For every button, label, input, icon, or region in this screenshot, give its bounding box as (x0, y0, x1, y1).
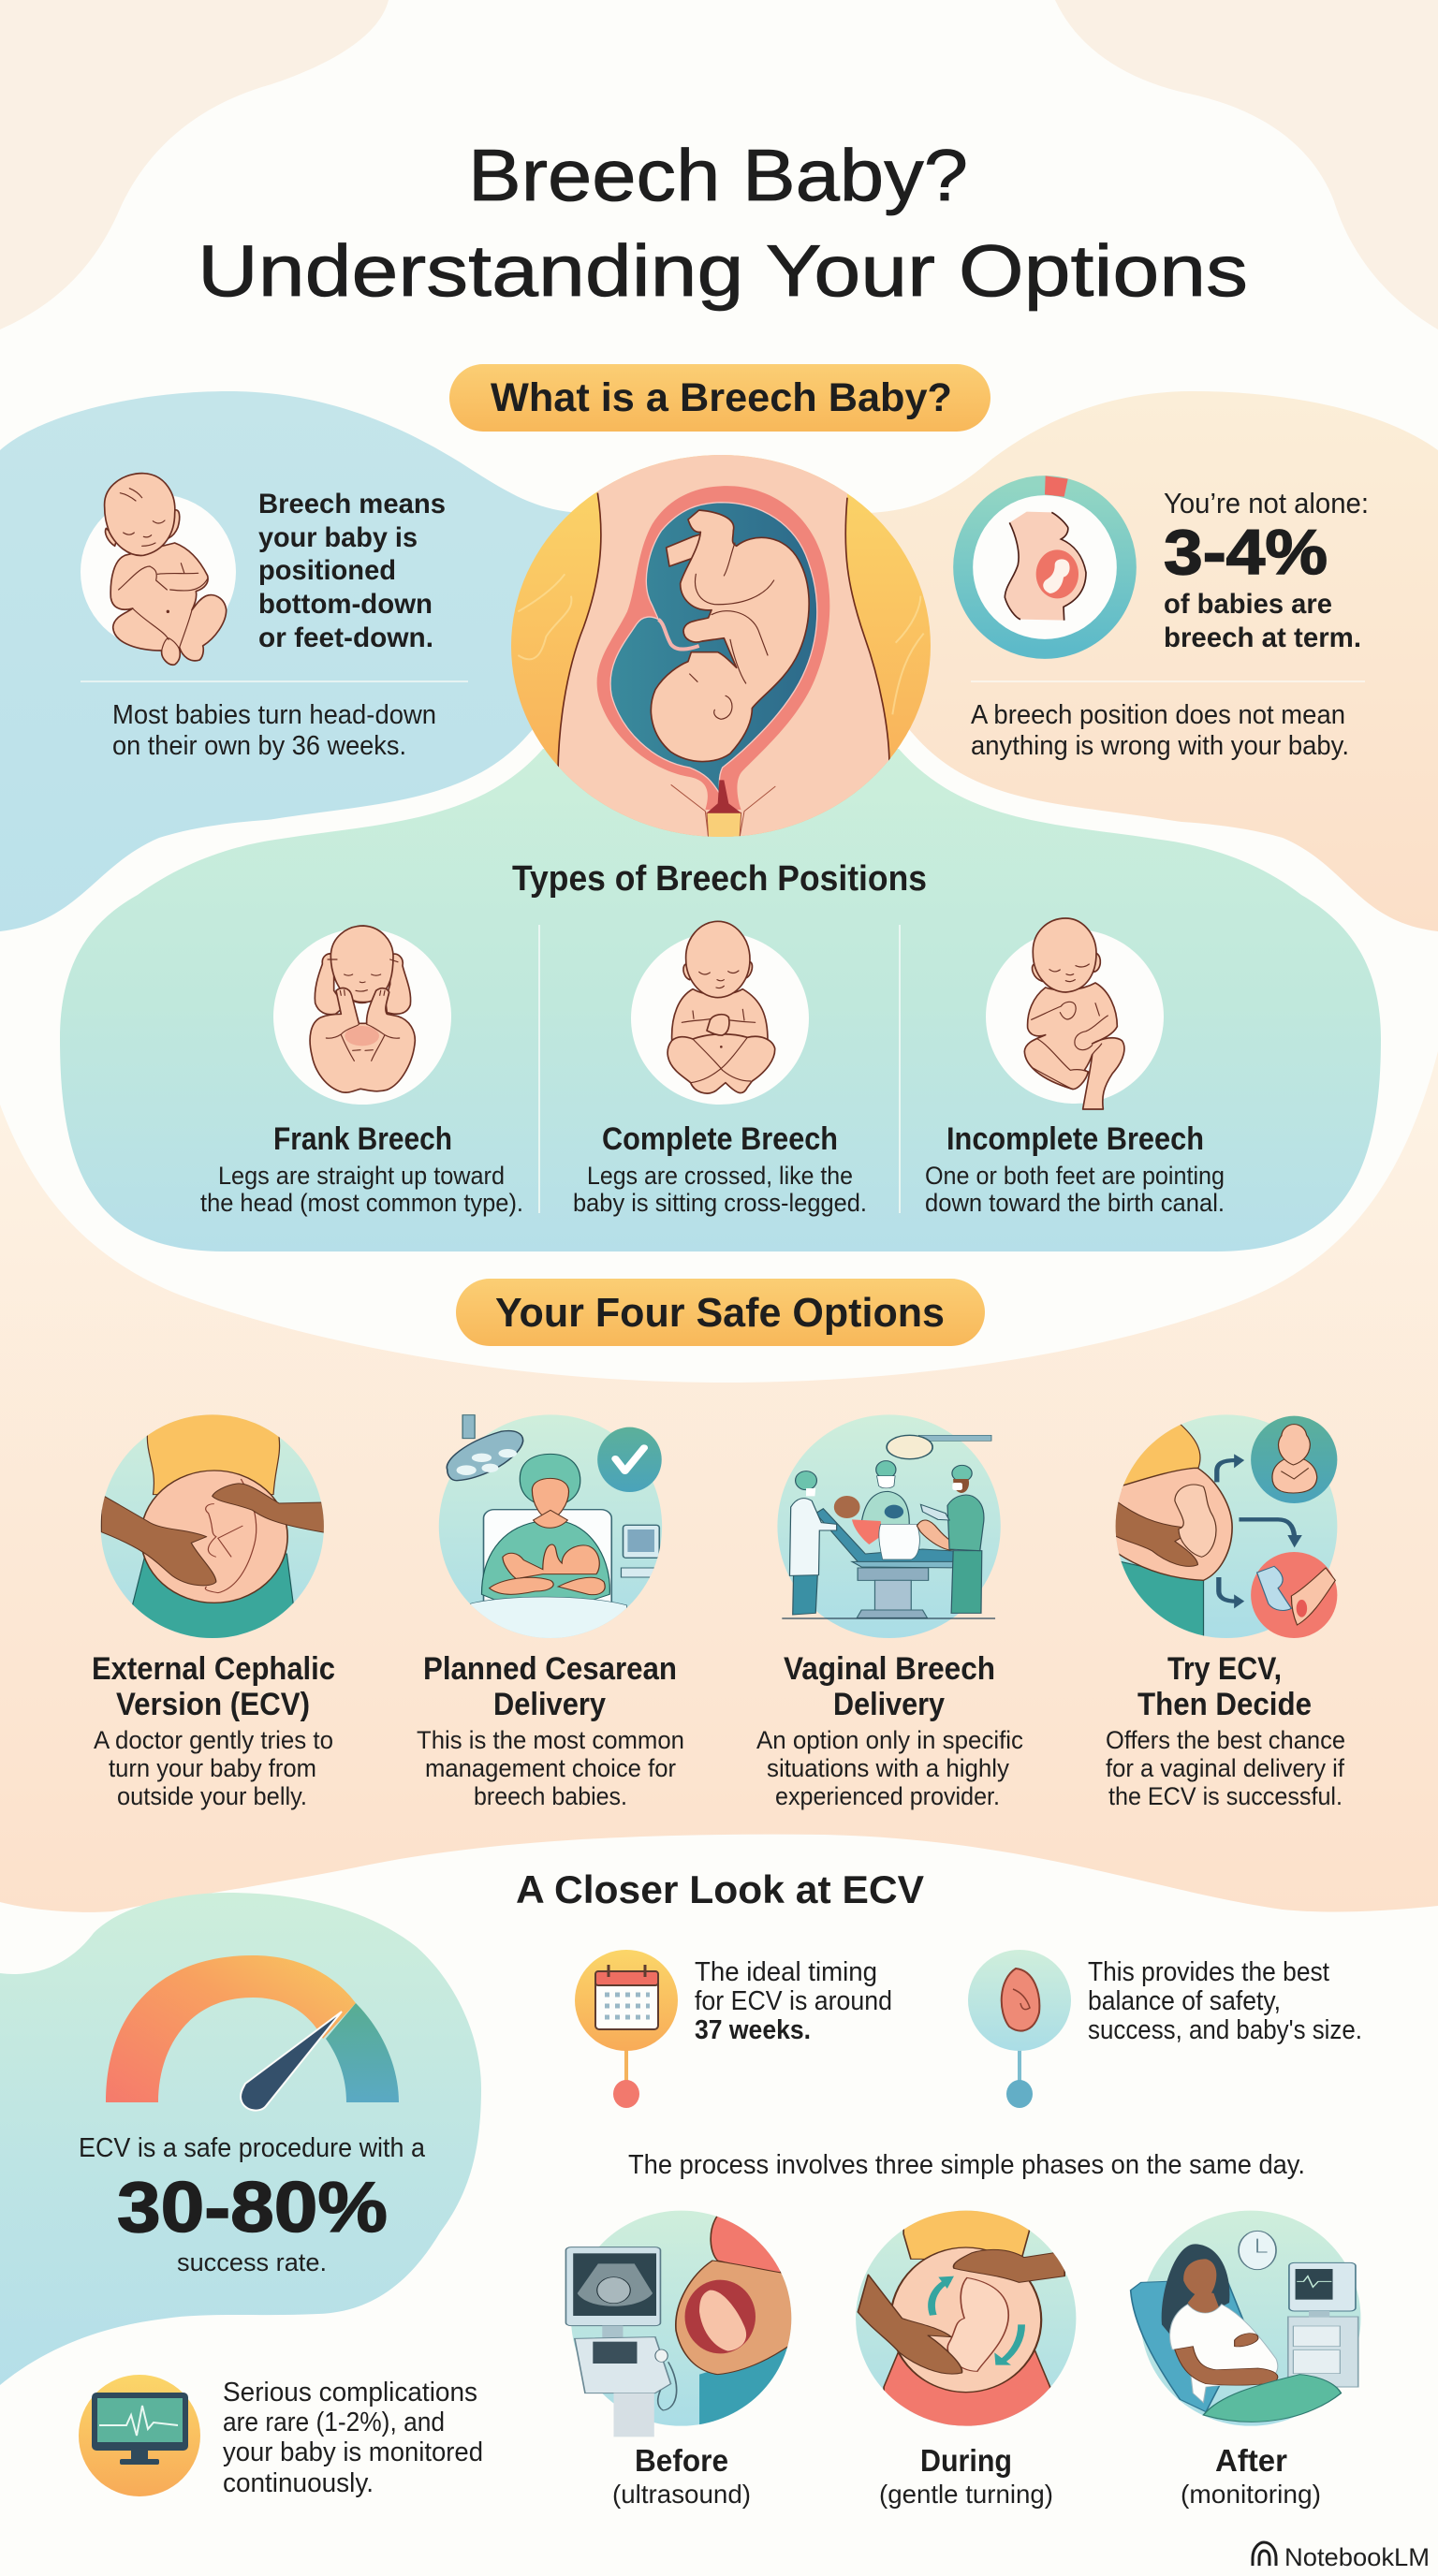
text: during (879, 2443, 1053, 2509)
panel: what is breech, left blue blob (0, 391, 599, 931)
title: Breech Baby? (468, 134, 968, 216)
option: external cephalic version (92, 1404, 335, 1810)
label: complete breech text: Complete Breech (602, 1121, 838, 1157)
phase: before (ultrasound) (565, 2211, 793, 2509)
text: complications (223, 2378, 483, 2498)
stat: 30-80% success rate (79, 2133, 426, 2276)
text: most babies turn: on their own by 36 weeks. (112, 731, 406, 761)
stat: 30-80% success rate: ECV is a safe procedure with a (79, 2133, 426, 2163)
text: ECV: External Cephalic (92, 1651, 335, 1687)
label: frank breech text: Legs are straight up toward (218, 1162, 505, 1190)
stat: 3-4% of babies (1164, 487, 1369, 653)
text: cesarean: breech babies. (474, 1782, 627, 1810)
label: incomplete breech text: Incomplete Breech (946, 1121, 1204, 1157)
text: best balance (1088, 1957, 1362, 2045)
text: vaginal breech: Delivery (833, 1687, 945, 1722)
text: three phases intro: The process involves three simple phases on the same day. (628, 2150, 1305, 2180)
text: best balance: success, and baby's size. (1088, 2015, 1362, 2045)
text: try ECV: the ECV is successful. (1108, 1782, 1343, 1810)
stat: 3-4% of babies: 3-4% (1164, 517, 1328, 588)
panel: ECV gauge blob (0, 1893, 481, 2385)
text: complications: are rare (1-2%), and (223, 2408, 445, 2437)
text: cesarean: Delivery (493, 1687, 606, 1722)
text: reassurance: A breech position does not mean (971, 700, 1345, 730)
text: reassurance (971, 700, 1349, 761)
text: best balance: balance of safety, (1088, 1986, 1281, 2016)
text: try ECV (1106, 1651, 1345, 1810)
icon: sleeping baby in white circle (81, 474, 236, 665)
icon: calendar with pin (575, 1950, 678, 2108)
section pill: Your Four Safe Options: Your Four Safe Options (495, 1290, 945, 1336)
text: complications: your baby is monitored (223, 2437, 483, 2467)
label: frank breech text: Frank Breech (273, 1121, 452, 1157)
icon: fetus with pin (968, 1950, 1071, 2108)
text: before: (ultrasound) (612, 2480, 751, 2509)
text: ideal timing (695, 1957, 892, 2045)
text: vaginal breech: situations with a highly (767, 1754, 1009, 1782)
label: incomplete breech text: One or both feet are pointing (925, 1162, 1225, 1190)
icon: complete breech baby (631, 921, 809, 1105)
text: most babies turn: Most babies turn head-down (112, 700, 436, 730)
label: complete breech text: Legs are crossed, like the (587, 1162, 853, 1190)
text: cesarean: management choice for (425, 1754, 676, 1782)
icon: hands on belly (101, 1404, 325, 1641)
icon: hands turning baby (856, 2206, 1076, 2431)
text: ECV: outside your belly. (117, 1782, 307, 1810)
stat: 3-4% of babies: You’re not alone: (1164, 487, 1369, 520)
text: try ECV: Then Decide (1137, 1687, 1312, 1722)
background: options section peach band (0, 1051, 1438, 1912)
icon: ultrasound machine and belly (565, 2211, 793, 2437)
label: complete breech text: baby is sitting cross-legged. (573, 1189, 867, 1217)
text: vaginal breech (756, 1651, 1023, 1810)
section pill: Your Four Safe Options (456, 1279, 985, 1346)
text: cesarean: This is the most common (417, 1726, 684, 1754)
phase: after (monitoring) (1131, 2211, 1360, 2509)
logo: NotebookLM: NotebookLM (1284, 2543, 1430, 2571)
text: before: Before (635, 2443, 728, 2478)
icon: decision arrows (1114, 1414, 1337, 1641)
label: frank breech text: the head (most common type). (200, 1189, 523, 1217)
type card: incomplete breech (925, 918, 1225, 1217)
text: reassurance: anything is wrong with your baby. (971, 731, 1349, 761)
panel: what is breech, right peach blob (843, 391, 1438, 931)
label: incomplete breech text (925, 1121, 1225, 1217)
text: cesarean (417, 1651, 684, 1810)
illustration: baby in womb (511, 449, 931, 855)
chart: success gauge (106, 1955, 399, 2111)
label: complete breech text (573, 1121, 867, 1217)
stat: 3-4% of babies: breech at term. (1164, 622, 1361, 653)
type card: complete breech (573, 921, 867, 1217)
section pill: What is a Breech Baby?: What is a Breech Baby? (491, 375, 952, 420)
icon: mother resting with monitor (1131, 2211, 1360, 2426)
option: try ECV then decide (1106, 1414, 1345, 1810)
icon: mother holding baby (439, 1414, 662, 1641)
chart: 3-4% ring icon (963, 476, 1126, 649)
text: try ECV: Offers the best chance (1106, 1726, 1345, 1754)
section pill: What is a Breech Baby? (449, 364, 990, 432)
icon: delivery room team (777, 1414, 1001, 1638)
type card: frank breech (200, 926, 523, 1217)
icon: incomplete breech baby (986, 918, 1164, 1109)
icon: frank breech baby (273, 926, 451, 1105)
heading: a closer look at ECV: A Closer Look at ECV (516, 1867, 924, 1911)
text: ideal timing: The ideal timing (695, 1957, 877, 1987)
stat: 30-80% success rate: success rate. (177, 2248, 327, 2276)
text: after: (monitoring) (1181, 2480, 1321, 2509)
label: incomplete breech text: down toward the birth canal. (925, 1189, 1225, 1217)
heading: types of breech positions: Types of Breech Positions (512, 859, 927, 899)
panel: types of breech positions background (60, 749, 1381, 1251)
label: frank breech text (200, 1121, 523, 1217)
text: best balance: This provides the best (1088, 1957, 1329, 1987)
text: ideal timing: 37 weeks. (695, 2015, 811, 2045)
stat: 3-4% of babies: of babies are (1164, 589, 1332, 620)
text: during: During (920, 2443, 1012, 2478)
text: after (1181, 2443, 1321, 2509)
text: vaginal breech: experienced provider. (775, 1782, 1000, 1810)
option: vaginal breech (756, 1414, 1023, 1810)
title (198, 134, 1248, 312)
text: breech definition: or feet-down. (258, 622, 433, 653)
text: vaginal breech: An option only in specific (756, 1726, 1023, 1754)
text: breech definition: positioned (258, 555, 396, 586)
stat: 30-80% success rate: 30-80% (117, 2168, 388, 2247)
text: vaginal breech: Vaginal Breech (784, 1651, 995, 1687)
text: breech definition: your baby is (258, 522, 418, 553)
text: complications: continuously. (223, 2468, 374, 2498)
text: during: (gentle turning) (879, 2480, 1053, 2509)
phase: during (gentle turning) (856, 2206, 1076, 2509)
icon: heart monitor (79, 2375, 200, 2496)
option: planned cesarean (417, 1414, 684, 1810)
text: breech definition (258, 489, 446, 653)
text: complications: Serious complications (223, 2378, 477, 2408)
text: breech definition: Breech means (258, 489, 446, 520)
background: top corner blobs (0, 0, 1438, 329)
text: try ECV: Try ECV, (1167, 1651, 1282, 1687)
text: cesarean: Planned Cesarean (423, 1651, 677, 1687)
text: ECV (92, 1651, 335, 1810)
text: ideal timing: for ECV is around (695, 1986, 892, 2016)
text: after: After (1215, 2443, 1287, 2478)
title: Understanding Your Options (198, 229, 1248, 312)
text: ECV: Version (ECV) (116, 1687, 310, 1722)
text: ECV: A doctor gently tries to (94, 1726, 333, 1754)
text: breech definition: bottom-down (258, 589, 433, 620)
text: before (612, 2443, 751, 2509)
text: most babies turn (112, 700, 436, 761)
text: ECV: turn your baby from (109, 1754, 316, 1782)
text: try ECV: for a vaginal delivery if (1106, 1754, 1344, 1782)
